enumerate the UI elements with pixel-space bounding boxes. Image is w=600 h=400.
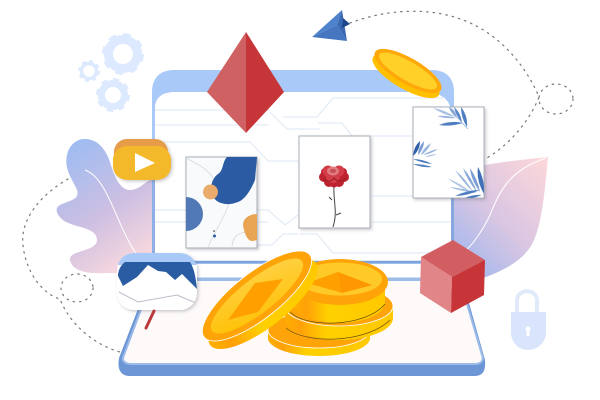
background leaf: right	[450, 157, 548, 282]
coin: front leaning	[190, 237, 330, 363]
flying gold coin	[367, 41, 447, 106]
red diamond	[207, 32, 284, 133]
icon: padlock	[511, 291, 546, 350]
rose stem	[329, 186, 341, 227]
bottom palm	[447, 167, 484, 199]
circuit lines on screen	[155, 98, 450, 253]
rose bloom	[319, 166, 349, 188]
red cube	[420, 240, 485, 313]
coin: middle	[285, 286, 393, 340]
icon: paper plane	[312, 10, 350, 41]
stack of gold coins	[190, 237, 393, 363]
icon: settings gears	[80, 36, 141, 110]
icon: mountain photo	[117, 253, 197, 310]
card: red rose	[299, 136, 370, 228]
hinge	[190, 264, 452, 278]
red pen	[146, 311, 154, 328]
middle palm	[413, 141, 438, 167]
coin: bottom	[268, 312, 370, 356]
coin: top	[290, 259, 388, 323]
background leaf: left	[57, 139, 157, 273]
card: abstract shapes	[186, 156, 260, 252]
laptop base	[118, 278, 485, 376]
icon: video play button	[113, 139, 171, 180]
dotted flight paths	[23, 11, 573, 352]
top palm	[433, 107, 468, 129]
laptop screen	[152, 70, 454, 278]
leaf veins	[85, 158, 546, 255]
card: palm leaves	[413, 107, 484, 199]
